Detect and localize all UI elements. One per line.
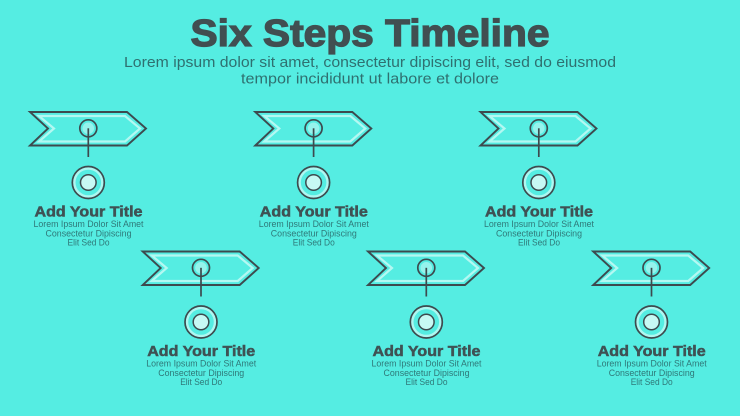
- subtitle: [124, 54, 616, 88]
- step 2: [255, 112, 371, 248]
- step 3: Add Your Title: [485, 204, 593, 220]
- step 3: Lorem Ipsum Dolor Sit Amet: [484, 219, 595, 229]
- step 5: Lorem Ipsum Dolor Sit Amet: [372, 358, 482, 368]
- step 2: Add Your Title: [260, 204, 368, 220]
- subtitle: tempor incididunt ut labore et dolore: [241, 70, 499, 88]
- step 4: Elit Sed Do: [180, 377, 222, 387]
- step 4: [143, 252, 259, 387]
- step 3: Consectetur Dipiscing: [496, 228, 582, 238]
- step 4: Lorem Ipsum Dolor Sit Amet: [146, 358, 257, 368]
- step 5: Add Your Title: [372, 344, 480, 360]
- step 4: Consectetur Dipiscing: [158, 368, 244, 378]
- step 6: Add Your Title: [598, 344, 706, 360]
- step 6: Elit Sed Do: [631, 377, 673, 387]
- step 1: Lorem Ipsum Dolor Sit Amet: [34, 219, 144, 229]
- step 1: [30, 112, 146, 248]
- title: Six Steps Timeline: [190, 13, 550, 55]
- step 1: Consectetur Dipiscing: [46, 228, 132, 238]
- subtitle: Lorem ipsum dolor sit amet, consectetur dipiscing elit, sed do eiusmod: [124, 54, 616, 71]
- step 1: Add Your Title: [34, 204, 142, 220]
- step 5: Elit Sed Do: [406, 377, 448, 387]
- step 2: Lorem Ipsum Dolor Sit Amet: [259, 219, 369, 229]
- step 2: Consectetur Dipiscing: [271, 228, 357, 238]
- step 1: Elit Sed Do: [68, 238, 110, 248]
- step 6: [593, 252, 709, 387]
- step 3: [480, 112, 596, 248]
- step 5: [368, 252, 484, 387]
- step 5: Consectetur Dipiscing: [384, 368, 470, 378]
- step 6: Consectetur Dipiscing: [609, 368, 695, 378]
- step 6: Lorem Ipsum Dolor Sit Amet: [597, 358, 707, 368]
- step 2: Elit Sed Do: [293, 238, 335, 248]
- step 4: Add Your Title: [147, 344, 255, 360]
- step 3: Elit Sed Do: [518, 238, 560, 248]
